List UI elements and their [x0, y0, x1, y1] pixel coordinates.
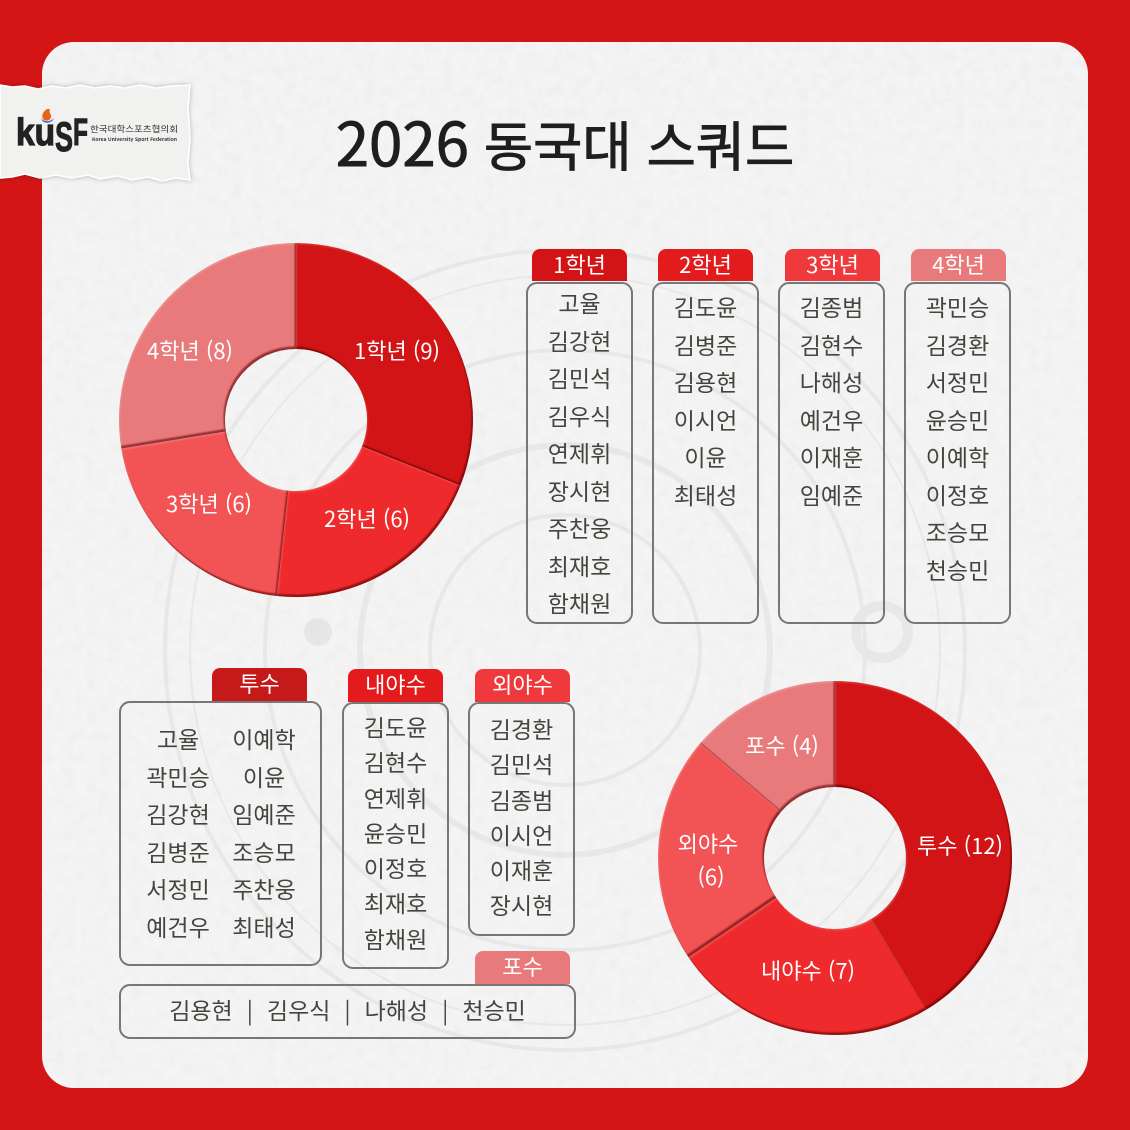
names: 투수 column 2: 이예학	[232, 721, 296, 755]
logo wordmark: F	[73, 112, 88, 154]
logo Korean name: 한국대학스포츠협의회	[90, 123, 178, 135]
names: 4학년: 윤승민	[926, 402, 989, 436]
names: 4학년: 이예학	[926, 439, 989, 473]
label: 3학년: 3학년 (6)	[166, 487, 252, 519]
tab: 내야수	[348, 669, 443, 702]
list panel: 포수	[119, 984, 576, 1039]
names: 투수 column 1: 곽민승	[146, 758, 210, 792]
names: 3학년	[800, 289, 863, 510]
donut chart: grade	[119, 243, 473, 597]
logo wordmark: ku	[16, 112, 55, 154]
names: 4학년: 천승민	[926, 552, 989, 586]
names: 투수 column 2	[232, 721, 296, 942]
label: 투수: 투수 (12)	[917, 829, 1003, 861]
names: 4학년: 서정민	[926, 364, 989, 398]
names: 2학년	[674, 289, 737, 510]
names: 1학년: 연제휘	[548, 435, 611, 469]
names: 내야수: 함채원	[364, 921, 427, 955]
tab: 1학년	[532, 249, 627, 281]
names: 외야수: 김경환	[490, 711, 553, 745]
names: 외야수: 장시현	[490, 887, 553, 921]
tab: 외야수	[475, 669, 570, 702]
names: 투수 column 1: 김병준	[146, 834, 210, 868]
label: 외야수: 외야수	[678, 827, 738, 859]
logo English name: Korea University Sport Federation	[92, 136, 177, 143]
names: 투수 column 2: 주찬웅	[232, 871, 296, 905]
tab: 1학년: 1학년	[553, 248, 606, 280]
names: 4학년	[926, 289, 989, 586]
names: 투수 column 1: 서정민	[146, 871, 210, 905]
slice: 3학년	[121, 432, 288, 596]
label: 내야수: 내야수 (7)	[761, 954, 855, 986]
names: 2학년: 김병준	[674, 326, 737, 360]
names: 1학년: 최재호	[548, 548, 611, 582]
names: 내야수: 김도윤	[364, 709, 427, 743]
list panel: 2학년	[652, 282, 759, 624]
list panel: 투수	[119, 701, 322, 966]
names: 2학년: 김용현	[674, 364, 737, 398]
names: 4학년: 김경환	[926, 326, 989, 360]
names: 3학년: 임예준	[800, 476, 863, 510]
names: 1학년: 장시현	[548, 472, 611, 506]
slice: 2학년	[277, 446, 460, 597]
names: 포수: 김용현 | 김우식 | 나해성 | 천승민	[169, 992, 526, 1026]
names: 내야수: 김현수	[364, 744, 427, 778]
slice: 1학년	[296, 243, 473, 486]
tab: 내야수: 내야수	[365, 668, 426, 700]
names: 2학년: 이윤	[684, 439, 727, 473]
tab: 4학년	[911, 249, 1006, 281]
tab: 외야수: 외야수	[492, 668, 553, 700]
names: 투수 column 2: 최태성	[232, 908, 296, 942]
slice: 투수	[835, 681, 1012, 1010]
label: 1학년: 1학년 (9)	[354, 334, 440, 366]
names: 투수 column 1: 김강현	[146, 796, 210, 830]
names: 4학년: 조승모	[926, 514, 989, 548]
names: 외야수: 김민석	[490, 746, 553, 780]
names: 1학년: 고율	[558, 285, 601, 319]
logo flame	[41, 109, 54, 123]
names: 외야수: 이시언	[490, 817, 553, 851]
label: 포수: 포수 (4)	[745, 729, 819, 761]
slice: 내야수	[688, 898, 926, 1035]
names: 3학년: 김현수	[800, 326, 863, 360]
label: 4학년: 4학년 (8)	[147, 334, 233, 366]
tab: 2학년	[658, 249, 753, 281]
names: 내야수: 최재호	[364, 885, 427, 919]
names: 내야수: 이정호	[364, 850, 427, 884]
tab: 2학년: 2학년	[679, 248, 732, 280]
names: 1학년: 김민석	[548, 360, 611, 394]
names: 1학년: 김우식	[548, 398, 611, 432]
names: 2학년: 김도윤	[674, 289, 737, 323]
names: 4학년: 곽민승	[926, 289, 989, 323]
names: 3학년: 나해성	[800, 364, 863, 398]
names: 외야수	[490, 711, 553, 921]
names: 2학년: 최태성	[674, 476, 737, 510]
list panel: 내야수	[342, 702, 449, 969]
names: 1학년: 함채원	[548, 585, 611, 619]
list panel: 1학년	[526, 282, 633, 624]
tab: 포수: 포수	[502, 950, 543, 982]
logo wordmark	[16, 112, 88, 160]
names: 외야수: 이재훈	[490, 852, 553, 886]
tab: 투수	[212, 668, 307, 701]
names: 3학년: 이재훈	[800, 439, 863, 473]
slice: 외야수	[658, 743, 781, 957]
tab: 투수: 투수	[239, 667, 280, 699]
logo: KUSF on torn paper	[0, 82, 194, 184]
tab: 포수	[475, 951, 570, 984]
names: 투수 column 2: 임예준	[232, 796, 296, 830]
names: 내야수	[364, 709, 427, 955]
names: 1학년	[548, 285, 611, 619]
names: 투수 column 2: 이윤	[243, 758, 285, 792]
names: 2학년: 이시언	[674, 402, 737, 436]
names: 1학년: 주찬웅	[548, 510, 611, 544]
names: 3학년: 예건우	[800, 402, 863, 436]
label: 외야수: (6)	[697, 860, 725, 892]
label: 외야수	[678, 827, 738, 892]
names: 1학년: 김강현	[548, 322, 611, 356]
logo wordmark: S	[55, 113, 73, 160]
names: 3학년: 김종범	[800, 289, 863, 323]
label: 2학년: 2학년 (6)	[324, 502, 410, 534]
tab: 3학년	[785, 249, 880, 281]
names: 내야수: 윤승민	[364, 815, 427, 849]
names: 투수 column 2: 조승모	[232, 834, 296, 868]
names: 투수 column 1: 고율	[157, 721, 199, 755]
title: 2026 동국대 스쿼드	[336, 97, 794, 184]
list panel: 3학년	[778, 282, 885, 624]
names: 투수 column 1	[146, 721, 210, 942]
tab: 4학년: 4학년	[932, 248, 985, 280]
list panel: 외야수	[468, 702, 575, 936]
names: 외야수: 김종범	[490, 782, 553, 816]
list panel: 4학년	[904, 282, 1011, 624]
slice: 4학년	[119, 243, 296, 449]
names: 투수 column 1: 예건우	[146, 908, 210, 942]
names: 4학년: 이정호	[926, 476, 989, 510]
slice: 포수	[700, 681, 835, 812]
donut chart: position	[658, 681, 1012, 1035]
tab: 3학년: 3학년	[806, 248, 859, 280]
names: 내야수: 연제휘	[364, 780, 427, 814]
